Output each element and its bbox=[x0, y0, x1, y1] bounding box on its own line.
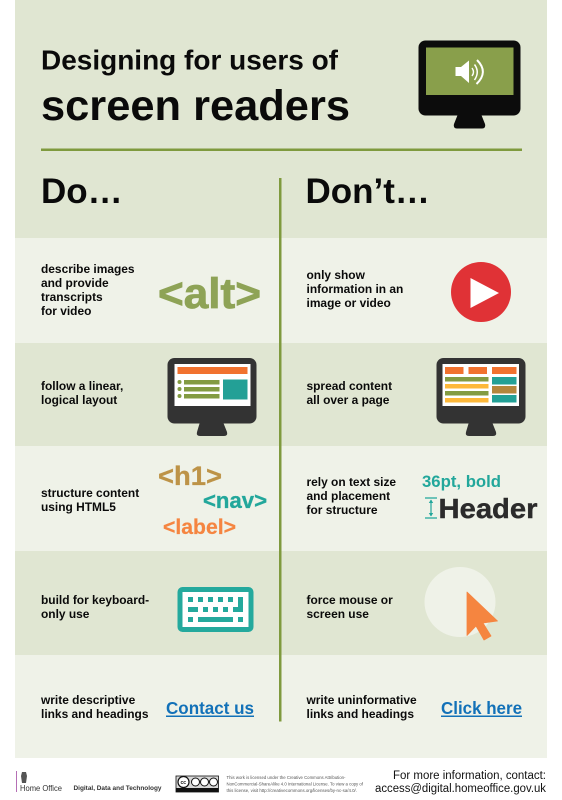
heading: Do: Do… bbox=[41, 172, 123, 211]
text: licence notice: This work is licensed under the Creative Commons Attribution- bbox=[226, 775, 346, 780]
divider: vertical column line bbox=[279, 178, 282, 722]
text: force mouse: force mouse or bbox=[306, 593, 393, 607]
icon: monitor with speaker bbox=[418, 40, 520, 128]
text: follow a linear: follow a linear, bbox=[41, 379, 123, 393]
text: spread content: all over a page bbox=[306, 393, 390, 407]
divider: horizontal rule bbox=[41, 148, 522, 151]
panel: row 5 background bbox=[15, 655, 547, 758]
text: rely on text size: rely on text size bbox=[306, 475, 396, 489]
text: licence notice: this license, visit http://creativecommons.org/licenses/by-nc-sa/4.0/. bbox=[226, 788, 357, 793]
panel: row 4 background bbox=[15, 551, 547, 655]
text: write uninformative: write uninformative bbox=[306, 693, 417, 707]
title: Designing for users of bbox=[41, 44, 339, 76]
text: licence notice: NonCommercial-ShareAlike 4.0 International License. To view a copy of bbox=[226, 782, 364, 786]
icon: creative commons badge: cc bbox=[180, 780, 186, 786]
logo: Home Office bbox=[16, 771, 62, 793]
icon: scattered layout monitor bbox=[436, 358, 526, 436]
panel: header background bbox=[15, 0, 547, 238]
icon: red play button bbox=[451, 262, 511, 322]
icon: keyboard bbox=[180, 590, 251, 630]
text: follow a linear: logical layout bbox=[41, 393, 117, 407]
icon: 36pt bold header: 36pt, bold bbox=[422, 472, 501, 491]
panel: row 2 background bbox=[15, 343, 547, 446]
icon: cursor in circle bbox=[424, 567, 498, 640]
heading: Don't: Don’t… bbox=[306, 172, 430, 211]
text: only show: only show bbox=[306, 268, 366, 282]
title bbox=[41, 44, 350, 130]
text: rely on text size: for structure bbox=[306, 503, 378, 517]
link: Contact us: Contact us bbox=[166, 698, 254, 718]
link: Click here: Click here bbox=[441, 698, 522, 718]
text: build for keyboard: only use bbox=[41, 607, 90, 621]
icon: html5 tags: <h1> bbox=[158, 461, 222, 491]
logo: Home Office: Home Office bbox=[20, 783, 62, 793]
text: write uninformative: links and headings bbox=[306, 707, 414, 721]
text: describe images: transcripts bbox=[41, 290, 103, 304]
title: screen readers bbox=[41, 82, 350, 130]
icon: linear layout monitor bbox=[168, 358, 256, 436]
text: force mouse: screen use bbox=[306, 607, 369, 621]
text: contact information bbox=[375, 770, 546, 795]
panel: row 1 background bbox=[15, 238, 547, 343]
text: write descriptive: links and headings bbox=[41, 707, 149, 721]
icon: alt tag: <alt> bbox=[158, 270, 261, 318]
text: structure content: structure content bbox=[41, 486, 139, 500]
panel: row 3 background bbox=[15, 446, 547, 551]
text: describe images: for video bbox=[41, 304, 91, 318]
text: write descriptive: write descriptive bbox=[40, 693, 136, 707]
text: describe images: describe images bbox=[41, 262, 135, 276]
icon: creative commons badge bbox=[176, 776, 218, 792]
text: structure content: using HTML5 bbox=[41, 500, 116, 514]
text: only show: information in an bbox=[306, 282, 403, 296]
text: spread content: spread content bbox=[306, 379, 392, 393]
text: only show: image or video bbox=[306, 296, 391, 310]
text: build for keyboard: build for keyboard- bbox=[41, 593, 149, 607]
icon: html5 tags bbox=[158, 461, 267, 539]
icon: html5 tags: <nav> bbox=[203, 488, 267, 513]
icon: 36pt bold header bbox=[422, 472, 538, 524]
icon: 36pt bold header: Header bbox=[438, 493, 538, 524]
text: Digital, Data and Technology: Digital, Data and Technology bbox=[74, 785, 162, 792]
text: rely on text size: and placement bbox=[306, 489, 390, 503]
icon: html5 tags: <label> bbox=[163, 516, 236, 539]
text: describe images: and provide bbox=[41, 276, 109, 290]
text: contact information: access@digital.homeoffice.gov.uk bbox=[375, 783, 546, 795]
text: contact information: For more information, contact: bbox=[393, 770, 546, 782]
